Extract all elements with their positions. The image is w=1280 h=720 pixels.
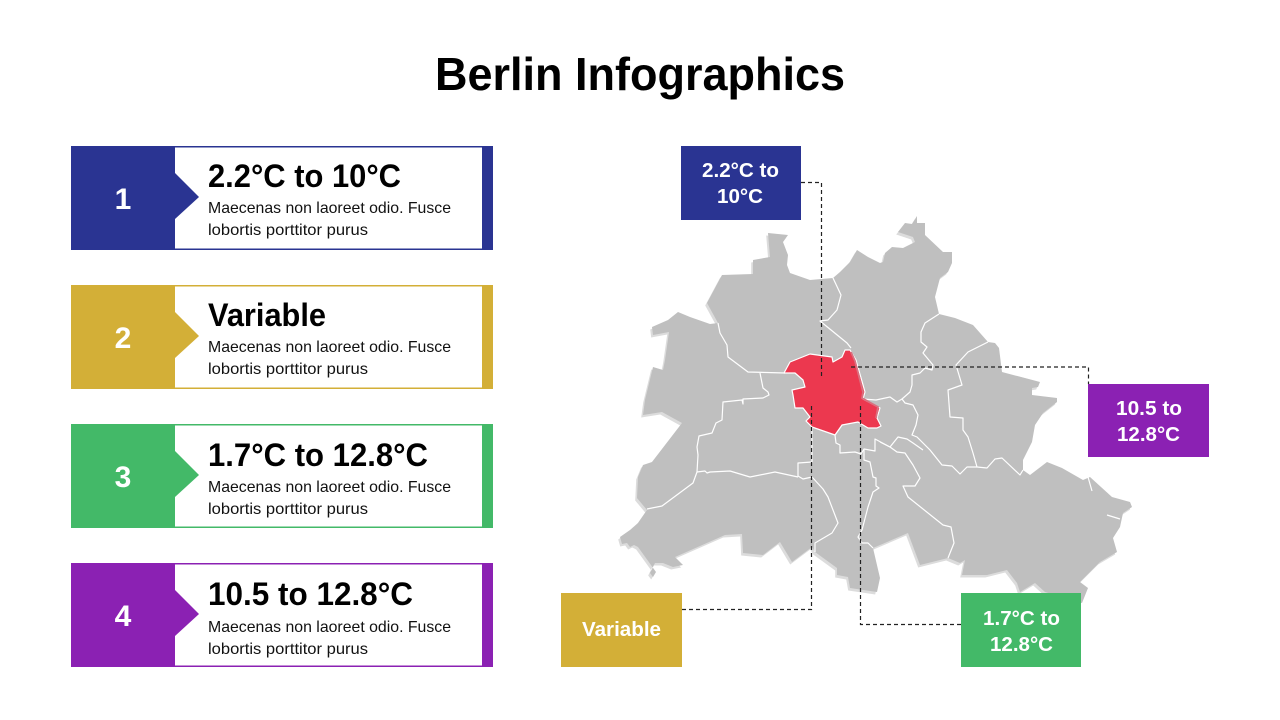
callout: blue: [681, 146, 801, 220]
connector: gold callout: [682, 405, 812, 610]
title: Berlin Infographics: [435, 48, 845, 100]
text block 1: Maecenas non laoreet odio. Fusce: [208, 200, 451, 217]
number 2: 2: [115, 322, 131, 355]
text block 1: [208, 200, 451, 239]
number 4: 4: [115, 600, 132, 633]
text block 4: Maecenas non laoreet odio. Fusce: [208, 619, 451, 636]
map of Berlin: [618, 216, 1132, 606]
district borders: [647, 278, 1120, 558]
heading 1: 2.2°C to 10°C: [208, 158, 401, 194]
connector: green callout: [860, 405, 961, 624]
callout: green: 1.7°C to: [983, 608, 1060, 630]
map land: [620, 216, 1132, 603]
text block 4: [208, 619, 451, 658]
callout: blue: 2.2°C to: [702, 160, 779, 182]
callout: green: [961, 593, 1081, 667]
callout: gold: Variable: [582, 619, 661, 641]
panel: item 1: [71, 146, 493, 250]
callout: blue: 10°C: [717, 186, 763, 208]
text block 2: lobortis porttitor purus: [208, 361, 368, 378]
panel: item 2: [71, 285, 493, 389]
heading 2: Variable: [208, 297, 326, 333]
callout: gold: [561, 593, 682, 667]
text block 3: Maecenas non laoreet odio. Fusce: [208, 479, 451, 496]
connector: purple callout: [851, 367, 1088, 384]
text block 4: lobortis porttitor purus: [208, 641, 368, 658]
callout: green: 12.8°C: [990, 634, 1053, 656]
panel: item 4: [71, 563, 493, 667]
highlighted district: [784, 350, 881, 435]
text block 3: lobortis porttitor purus: [208, 501, 368, 518]
callout: purple: 10.5 to: [1116, 398, 1182, 420]
text block 2: Maecenas non laoreet odio. Fusce: [208, 339, 451, 356]
connector: blue callout: [801, 182, 822, 378]
callout: purple: [1088, 384, 1209, 457]
text block 3: [208, 479, 451, 518]
map drop edge: [618, 218, 1130, 606]
panel: item 3: [71, 424, 493, 528]
number 3: 3: [115, 461, 131, 494]
heading 4: 10.5 to 12.8°C: [208, 576, 413, 612]
number 1: 1: [115, 183, 131, 216]
callout: purple: 12.8°C: [1117, 424, 1180, 446]
heading 3: 1.7°C to 12.8°C: [208, 437, 428, 473]
text block 1: lobortis porttitor purus: [208, 222, 368, 239]
text block 2: [208, 339, 451, 378]
